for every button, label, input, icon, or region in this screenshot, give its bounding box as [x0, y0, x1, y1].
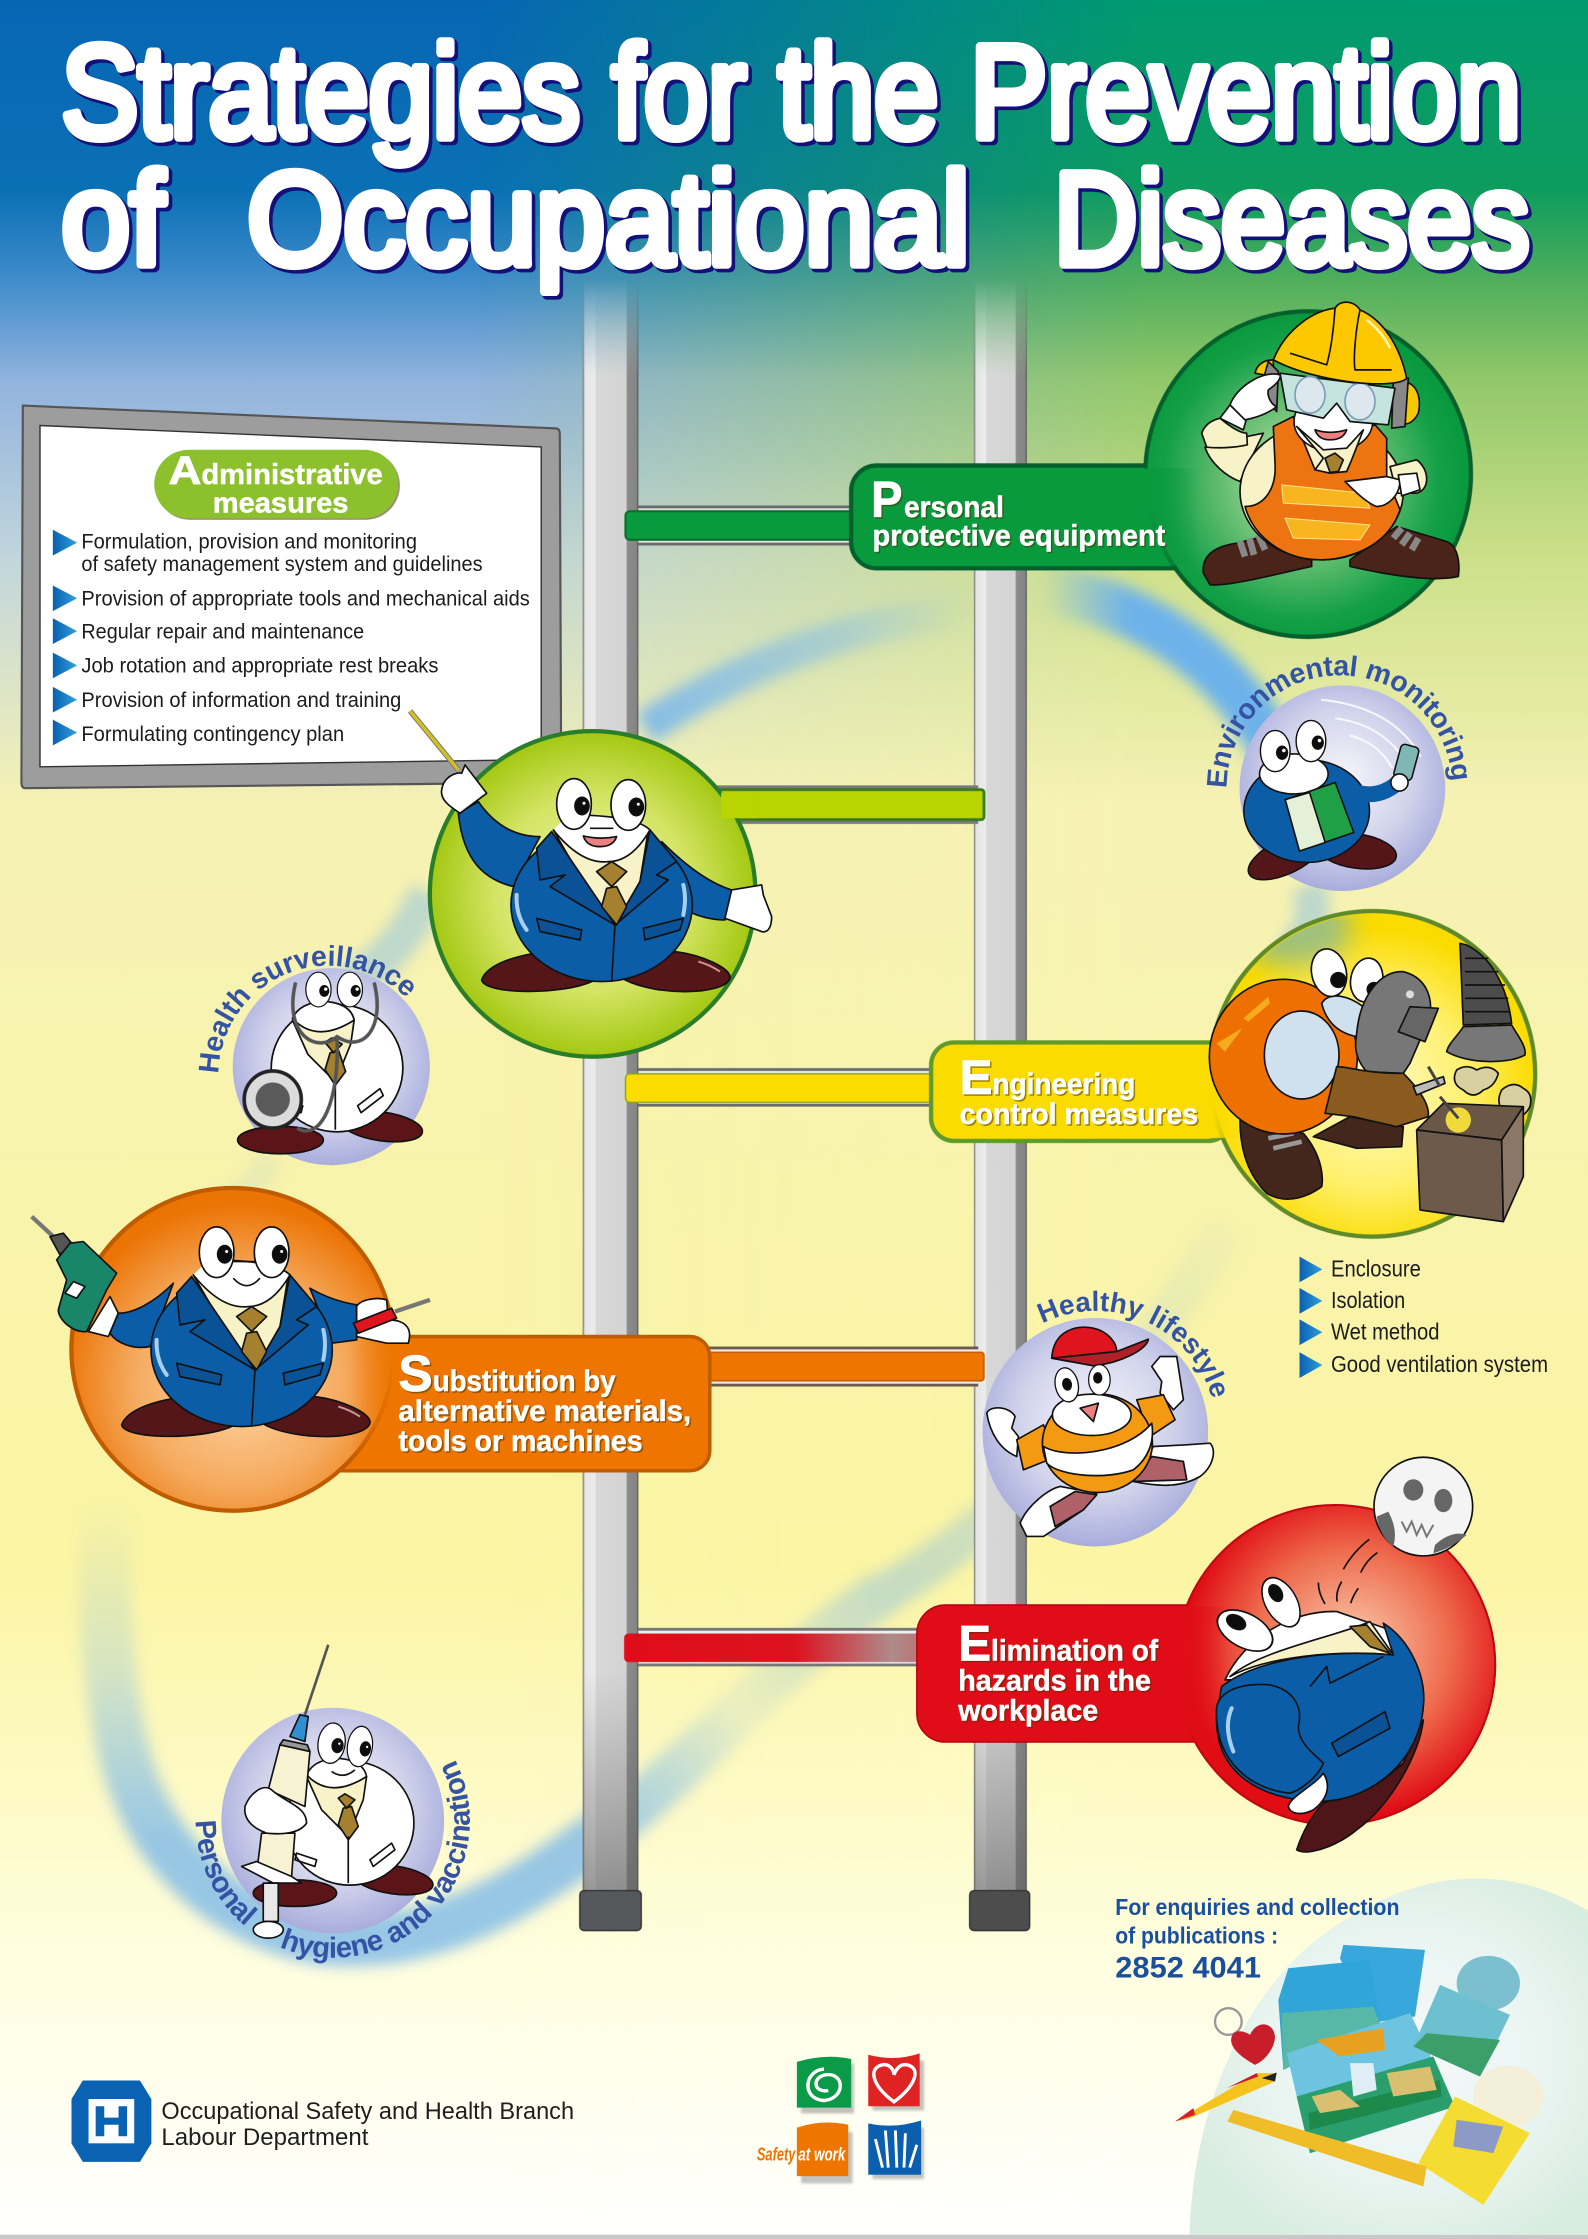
- list: engineering measures: [1300, 1256, 1548, 1378]
- list: administrative measures: Job rotation and appropriate rest breaks: [81, 654, 438, 678]
- label: substitution: [398, 1344, 691, 1458]
- rung: personal protective equipment: [625, 505, 883, 545]
- label: personal: Personal: [196, 1821, 258, 1926]
- label: engineering control measures: E: [960, 1051, 992, 1105]
- label: substitution: tools or machines: [398, 1425, 643, 1458]
- logo: occupational safety and health branch: [71, 2080, 151, 2162]
- keyring: [1215, 2008, 1275, 2065]
- ladder left rail: [583, 278, 638, 1892]
- heading: administrative measures: measures: [213, 488, 348, 520]
- mascot: running with cap: [987, 1327, 1213, 1536]
- panel: personal hygiene and vaccination: [196, 1644, 470, 1964]
- panel: elimination of hazards: [917, 1457, 1495, 1852]
- list: administrative measures: of safety management system and guidelines: [81, 552, 483, 576]
- mascot: presenter in suit: [410, 711, 772, 992]
- label: personal protective equipment: ersonal: [904, 491, 1004, 524]
- list: administrative measures: Provision of information and training: [81, 688, 401, 712]
- label: personal protective equipment: P: [871, 470, 903, 528]
- rung: substitution: [700, 1347, 984, 1387]
- list: administrative measures: Provision of appropriate tools and mechanical aids: [81, 586, 530, 610]
- label: substitution: ubstitution by: [433, 1365, 616, 1398]
- title: Diseases: [1057, 148, 1532, 295]
- panel: personal protective equipment: [851, 302, 1471, 637]
- mascot: doctor with stethoscope: [238, 972, 424, 1154]
- list: administrative measures: [53, 529, 530, 746]
- rung: administrative measures: [714, 785, 984, 824]
- title: Diseases: [1054, 145, 1529, 292]
- panel: health surveillance: [198, 945, 430, 1166]
- signal waves: [1321, 700, 1421, 768]
- title: Occupational: [247, 145, 970, 292]
- discs and case: [1413, 1956, 1543, 2205]
- rung: elimination: [624, 1628, 938, 1666]
- mascot: welder: [1209, 943, 1531, 1222]
- label: elimination: limination of: [991, 1635, 1159, 1668]
- ladder feet: [580, 1891, 1030, 1931]
- pen: [1175, 2073, 1277, 2121]
- contact text: of publications :: [1115, 1922, 1278, 1948]
- logo: safety at work: [757, 2053, 924, 2183]
- mascot: worker with hard hat: [1202, 302, 1459, 585]
- label: environmental monitoring: Environmental monitoring: [1206, 655, 1468, 788]
- ruler: [1227, 2110, 1427, 2186]
- arc path: health surveillance: [218, 966, 457, 1085]
- heading: administrative measures: A: [169, 449, 201, 493]
- title: of: [64, 148, 168, 295]
- ladder rails: [583, 278, 1027, 1892]
- arc path: healthy lifestyle: [1042, 1311, 1228, 1485]
- label: engineering control measures: ngineering: [992, 1068, 1135, 1101]
- publications backdrop: [1190, 1878, 1588, 2235]
- mascot: with monitor and book: [1242, 720, 1420, 889]
- label: personal protective equipment: [871, 470, 1165, 552]
- label: engineering control measures: [960, 1051, 1198, 1131]
- label: elimination: E: [958, 1616, 991, 1672]
- label: elimination: workplace: [957, 1695, 1098, 1728]
- arc path: environmental monitoring: [1227, 675, 1452, 885]
- list: engineering measures: Wet method: [1331, 1318, 1439, 1344]
- contact text: [1115, 1894, 1399, 1985]
- panel: substitution: [32, 1188, 710, 1511]
- list: administrative measures: Formulating contingency plan: [81, 722, 344, 746]
- label: substitution: alternative materials,: [398, 1395, 691, 1428]
- logo: safety at work: at work: [798, 2143, 847, 2164]
- title: [61, 18, 1532, 295]
- heading: administrative measures: [154, 449, 398, 520]
- label: elimination: [957, 1616, 1159, 1728]
- blue ribbon swirl: [106, 588, 1313, 1941]
- title: Occupational: [250, 148, 973, 295]
- mascot: falling over: [1211, 1539, 1424, 1852]
- contact text: For enquiries and collection: [1115, 1894, 1399, 1920]
- arc path: personal hygiene and vaccination: [196, 1724, 470, 1958]
- label: health surveillance: Health surveillance: [198, 945, 414, 1072]
- icon: skull: [1374, 1457, 1473, 1556]
- list: administrative measures: Formulation, provision and monitoring: [81, 529, 417, 553]
- heading: administrative measures: dministrative: [201, 459, 383, 491]
- list: engineering measures: Good ventilation system: [1331, 1351, 1548, 1377]
- panel: engineering control measures: [931, 891, 1535, 1237]
- mascot: doctor with syringe: [242, 1645, 435, 1938]
- panel: whiteboard with administrative measures: [21, 406, 561, 788]
- text: department name: [161, 2098, 574, 2151]
- label: hygiene and vaccination: hygiene and vaccination: [281, 1760, 470, 1964]
- label: personal protective equipment: protective equipment: [873, 519, 1165, 552]
- logo: safety at work: Safety: [757, 2143, 797, 2164]
- label: healthy lifestyle: Healthy lifestyle: [1036, 1290, 1225, 1397]
- list: administrative measures: Regular repair and maintenance: [81, 619, 364, 643]
- label: substitution: S: [398, 1344, 433, 1402]
- panel: environmental monitoring: [1206, 655, 1468, 891]
- text: department name: Occupational Safety and Health Branch: [161, 2098, 574, 2125]
- label: elimination: hazards in the: [958, 1665, 1151, 1698]
- rung: engineering control: [625, 1068, 947, 1107]
- text: department name: Labour Department: [161, 2124, 369, 2151]
- panel: healthy lifestyle: [982, 1290, 1225, 1546]
- list: engineering measures: Enclosure: [1331, 1256, 1421, 1282]
- ladder right rail: [974, 278, 1027, 1892]
- publications display: [1175, 1945, 1543, 2205]
- label: engineering control measures: control measures: [960, 1098, 1198, 1131]
- mascot: holding drill and screwdriver: [32, 1217, 430, 1437]
- panel: administrative measures circle: [410, 711, 772, 1057]
- list: engineering measures: Isolation: [1331, 1287, 1405, 1313]
- contact text: 2852 4041: [1115, 1952, 1261, 1985]
- title: of: [61, 145, 165, 292]
- booklets: [1278, 1945, 1455, 2153]
